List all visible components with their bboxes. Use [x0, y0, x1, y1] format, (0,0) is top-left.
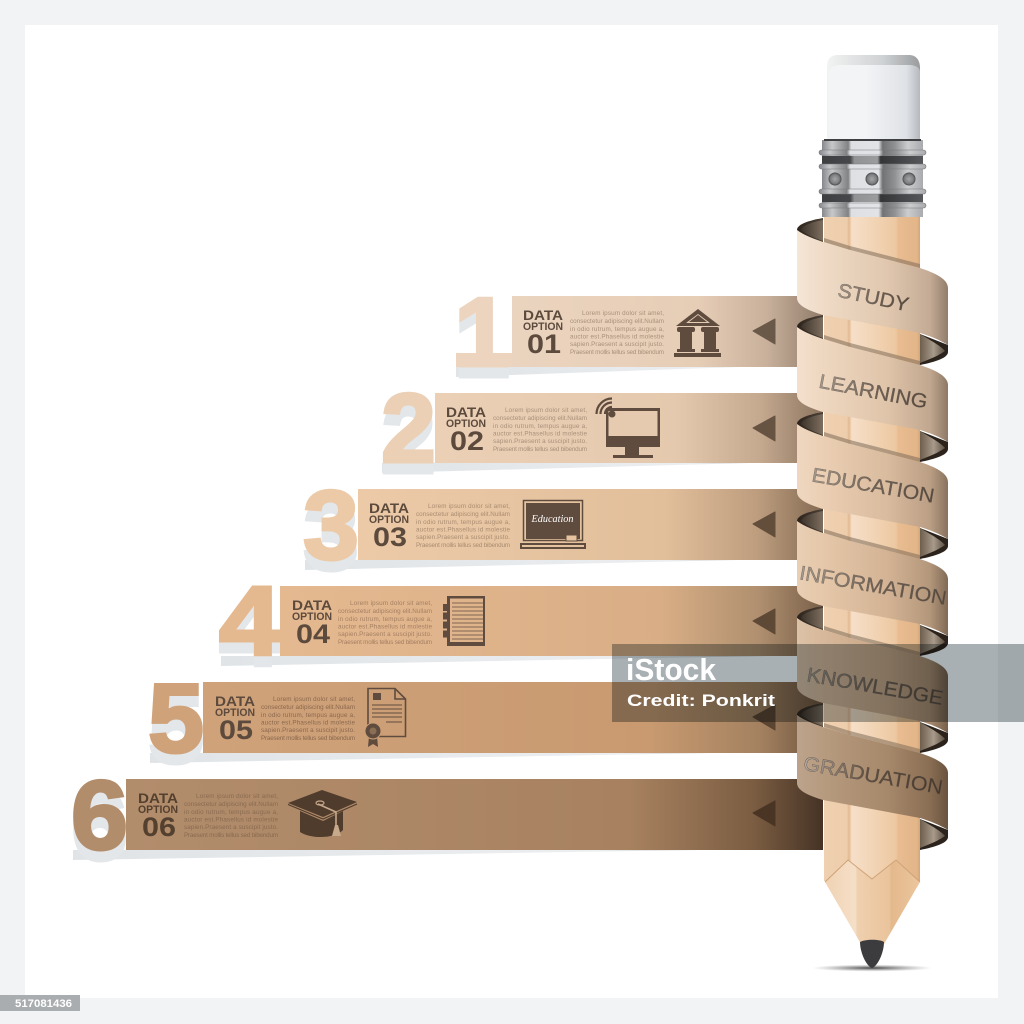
body text: auctor est.Phasellus id molestie: [493, 430, 587, 438]
data option label: [523, 307, 563, 359]
arrow: [753, 416, 775, 441]
icon: graduation cap: [288, 790, 357, 837]
body text: sapien.Praesent a suscipit justo.: [261, 727, 355, 734]
metal ferrule: [819, 139, 926, 217]
body text: Lorem ipsum dolor sit amet,: [582, 310, 664, 317]
data option label: [138, 790, 178, 842]
body text: sapien.Praesent a suscipit justo.: [338, 631, 432, 638]
arrow: [753, 512, 775, 537]
body text: auctor est.Phasellus id molestie: [338, 624, 432, 630]
body text: Praesent mollis tellus sed bibendum: [338, 639, 432, 646]
panel: step 1: [454, 277, 823, 398]
panel: step 3: 3: [303, 470, 359, 580]
panel: step 4: 4: [219, 577, 281, 687]
arrow: [753, 609, 775, 634]
body text: in odio rutrum, tempus augue a,: [416, 519, 510, 526]
icon: notebook: [443, 596, 485, 646]
body text: sapien.Praesent a suscipit justo.: [493, 438, 587, 445]
panel: step 6: [71, 760, 823, 881]
pencil body: [824, 217, 920, 881]
body text: Praesent mollis tellus sed bibendum: [570, 349, 664, 356]
ribbon: knowledge: [797, 606, 948, 753]
data option label: DATA: [138, 790, 178, 806]
body text: consectetur adipiscing elit.Nullam: [416, 511, 510, 518]
body text: in odio rutrum, tempus augue a,: [338, 616, 432, 623]
ribbon: education: [797, 412, 948, 559]
panel: step 3: 3: [303, 481, 359, 591]
data option label: OPTION: [215, 707, 255, 719]
icon: chalkboard: [520, 500, 586, 549]
panel: step 2: [381, 373, 823, 494]
body text: in odio rutrum, tempus augue a,: [493, 423, 587, 430]
data option label: DATA: [292, 597, 332, 613]
data option label: 01: [527, 329, 561, 359]
panel: step 6: 6: [71, 760, 128, 870]
label: learning: LEARNING: [817, 371, 929, 413]
data option label: DATA: [446, 404, 486, 420]
data option label: DATA: [369, 500, 409, 516]
data option label: DATA: [523, 307, 563, 323]
panel: step 2: 2: [381, 384, 436, 494]
arrow: [753, 705, 775, 730]
panel: step 2: 2: [381, 373, 436, 483]
data option label: OPTION: [292, 611, 332, 623]
body text: Praesent mollis tellus sed bibendum: [416, 542, 510, 549]
body text: Praesent mollis tellus sed bibendum: [261, 735, 355, 742]
icon: monitor with wifi: [596, 398, 660, 458]
body text: [416, 503, 510, 549]
data option label: [446, 404, 486, 456]
body text: consectetur adipiscing elit.Nullam: [184, 801, 278, 808]
panel: step 5: 5: [148, 663, 204, 773]
data option label: 02: [450, 426, 484, 456]
pencil ground shadow: [812, 964, 932, 972]
label: knowledge: KNOWLEDGE: [805, 664, 945, 710]
body text: consectetur adipiscing elit.Nullam: [493, 415, 587, 422]
panel: step 4: [219, 566, 823, 687]
icon: chalkboard: Education: [531, 513, 574, 525]
arrow: [753, 801, 775, 826]
data option label: 04: [296, 619, 330, 649]
image id tag: 517081436: [15, 998, 72, 1010]
body text: [338, 600, 432, 646]
label: study: STUDY: [836, 280, 911, 316]
watermark: iStock: iStock: [626, 652, 717, 687]
data option label: OPTION: [523, 321, 563, 333]
watermark: credit: Credit: Ponkrit: [627, 692, 776, 710]
body text: [493, 407, 587, 453]
pencil tip: [825, 860, 920, 968]
image id tag: [0, 995, 80, 1011]
eraser: [827, 55, 920, 141]
body text: sapien.Praesent a suscipit justo.: [416, 534, 510, 541]
ribbon: information: [797, 509, 948, 656]
body text: Praesent mollis tellus sed bibendum: [184, 832, 278, 839]
data option label: OPTION: [138, 804, 178, 816]
data option label: 05: [219, 715, 253, 745]
body text: sapien.Praesent a suscipit justo.: [570, 341, 664, 348]
body text: [570, 310, 664, 356]
panel: step 5: [148, 663, 823, 784]
panel: step 1: 1: [454, 288, 510, 398]
body text: Lorem ipsum dolor sit amet,: [428, 503, 510, 510]
body text: Lorem ipsum dolor sit amet,: [196, 793, 278, 800]
icon: certificate: [365, 688, 406, 747]
body text: in odio rutrum, tempus augue a,: [261, 712, 355, 719]
panel: step 6: 6: [71, 771, 128, 881]
body text: auctor est.Phasellus id molestie: [184, 816, 278, 824]
panel: step 4: 4: [219, 566, 281, 676]
body text: auctor est.Phasellus id molestie: [570, 334, 664, 340]
body text: consectetur adipiscing elit.Nullam: [570, 318, 664, 325]
data option label: 06: [142, 812, 176, 842]
body text: [261, 696, 355, 742]
icon: bank: [674, 309, 721, 357]
label: information: INFORMATION: [798, 562, 948, 610]
panel: step 1: 1: [454, 277, 510, 387]
panel: step 5: 5: [148, 674, 204, 784]
body text: in odio rutrum, tempus augue a,: [184, 809, 278, 816]
body text: Lorem ipsum dolor sit amet,: [273, 696, 355, 703]
data option label: DATA: [215, 693, 255, 709]
data option label: [292, 597, 332, 649]
data option label: 03: [373, 522, 407, 552]
panel: step 3: [303, 470, 823, 591]
ribbon: learning: [797, 315, 948, 462]
body text: consectetur adipiscing elit.Nullam: [261, 704, 355, 711]
label: education: EDUCATION: [810, 464, 936, 508]
arrow: [753, 319, 775, 344]
body text: in odio rutrum, tempus augue a,: [570, 326, 664, 333]
data option label: [369, 500, 409, 552]
data option label: OPTION: [369, 514, 409, 526]
ribbon: graduation: [797, 703, 948, 850]
body text: auctor est.Phasellus id molestie: [261, 720, 355, 726]
body text: Praesent mollis tellus sed bibendum: [493, 446, 587, 453]
watermark band: [612, 644, 1024, 722]
body text: [184, 793, 278, 839]
body text: Lorem ipsum dolor sit amet,: [350, 600, 432, 607]
ribbon: study: [797, 218, 948, 365]
body text: auctor est.Phasellus id molestie: [416, 526, 510, 534]
data option label: OPTION: [446, 418, 486, 430]
body text: consectetur adipiscing elit.Nullam: [338, 608, 432, 615]
body text: sapien.Praesent a suscipit justo.: [184, 824, 278, 831]
label: graduation: GRADUATION: [802, 753, 944, 799]
data option label: [215, 693, 255, 745]
icon: pencil: [812, 55, 932, 972]
body text: Lorem ipsum dolor sit amet,: [505, 407, 587, 414]
